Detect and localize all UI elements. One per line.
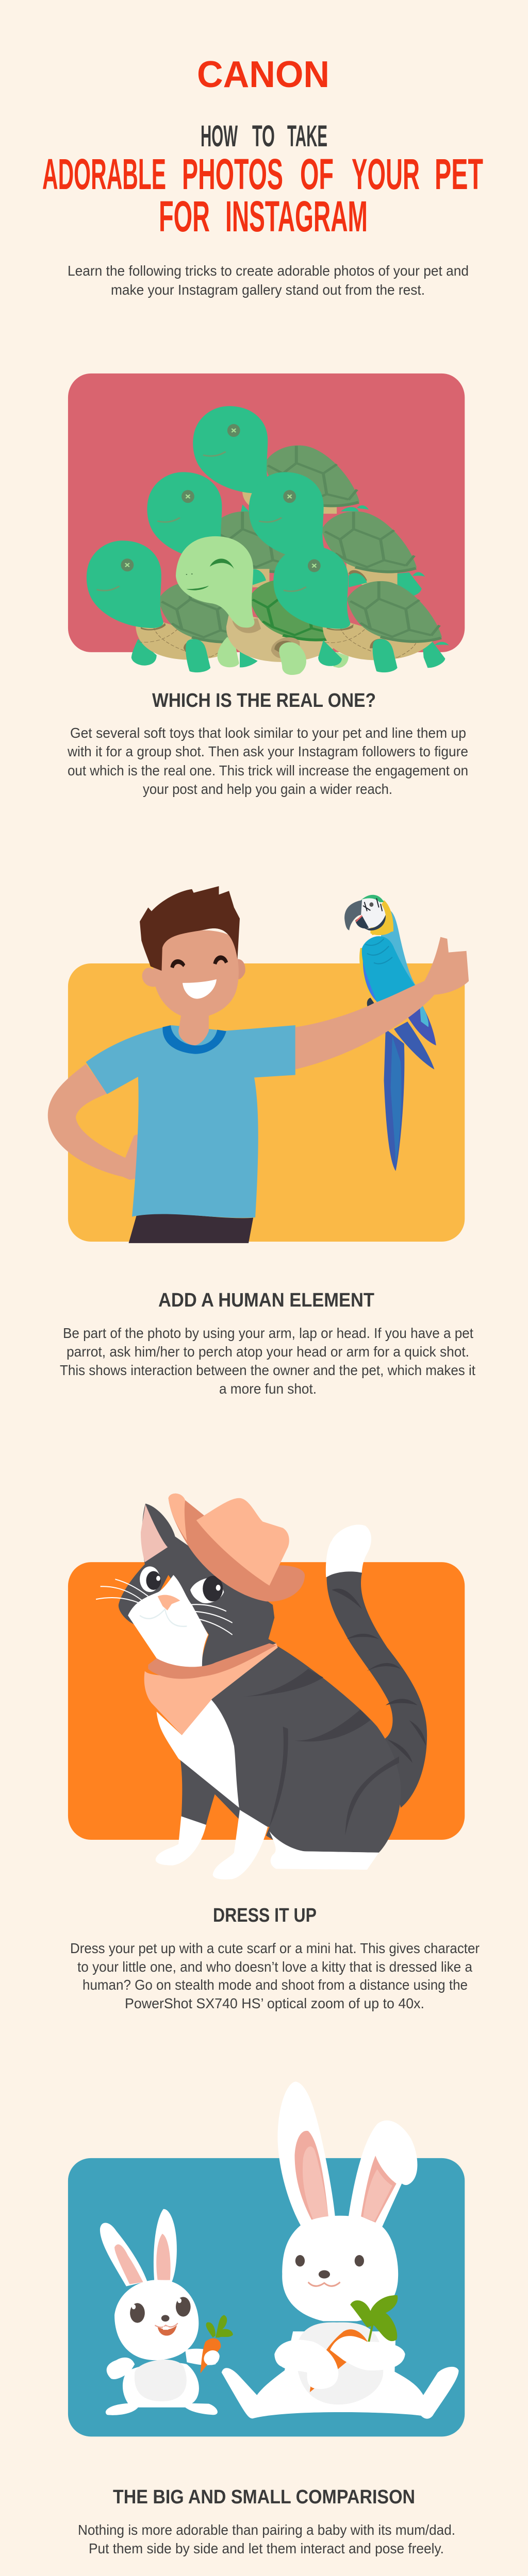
icon: cat body [156, 1646, 401, 1879]
section 1 body: Get several soft toys that look similar to your pet and line them up [70, 725, 466, 741]
panel: cat illustration [68, 1494, 465, 1879]
real turtle, centre [176, 536, 349, 675]
section 1 body: your post and help you gain a wider reach. [143, 781, 392, 797]
man pants [128, 1214, 253, 1243]
title: PHOTOS [182, 150, 283, 198]
section 1 body [67, 725, 468, 797]
intro text: make your Instagram gallery stand out from the rest. [111, 282, 425, 298]
title: OF [300, 150, 334, 198]
section 4 heading: THE BIG AND SMALL COMPARISON [113, 2486, 415, 2508]
man neck [178, 1010, 209, 1045]
icon: cat head [96, 1503, 276, 1669]
title: FOR [159, 192, 210, 241]
man right arm [295, 937, 469, 1070]
section 2 body [60, 1325, 475, 1397]
section 1 body: with it for a group shot. Then ask your Instagram followers to figure [67, 743, 468, 759]
title: TAKE [287, 120, 327, 153]
icon: hat [169, 1494, 305, 1602]
title: HOW [201, 120, 238, 153]
section 2 body: a more fun shot. [219, 1381, 317, 1397]
title: PET [435, 150, 483, 198]
icon: big rabbit [222, 2082, 459, 2419]
icon: man [48, 886, 469, 1243]
section 2 body: parrot, ask him/her to perch atop your head or arm for a quick shot. [67, 1344, 469, 1360]
turtle top [193, 406, 369, 514]
title: TO [252, 120, 275, 153]
icon: parrot [344, 895, 436, 1171]
title: YOUR [352, 150, 420, 198]
section 4 body: Put them side by side and let them interact and pose freely. [89, 2540, 444, 2556]
turtle left bottom [87, 540, 253, 672]
title: INSTAGRAM [225, 192, 368, 241]
icon: baby rabbit [100, 2209, 233, 2415]
panel background: pink [68, 374, 465, 652]
section 3 heading: DRESS IT UP [213, 1905, 317, 1926]
intro text: Learn the following tricks to create adorable photos of your pet and [68, 263, 469, 279]
panel: turtles illustration [68, 374, 465, 675]
section 3 body: human? Go on stealth mode and shoot from a distance using the [82, 1977, 468, 1993]
turtle right bottom [273, 546, 449, 672]
man shirt [86, 1025, 295, 1218]
man head [140, 886, 245, 1019]
turtle second row right [322, 512, 425, 597]
panel: rabbits illustration [68, 2082, 465, 2436]
title [42, 120, 483, 241]
section 4 body [78, 2522, 455, 2556]
panel: man with parrot illustration [48, 886, 469, 1243]
panel background: orange [68, 1562, 465, 1840]
section 2 body: Be part of the photo by using your arm, lap or head. If you have a pet [63, 1325, 473, 1341]
section 2 heading: ADD A HUMAN ELEMENT [158, 1290, 374, 1311]
section 1 body: out which is the real one. This trick will increase the engagement on [68, 762, 468, 778]
third head, second row centre [249, 472, 326, 560]
section 3 body: to your little one, and who doesn’t love a kitty that is dressed like a [77, 1959, 472, 1975]
icon: cat tail [326, 1524, 427, 1808]
logo: Canon: CANON [197, 54, 329, 95]
icon: bandana [144, 1643, 278, 1735]
section 3 body: Dress your pet up with a cute scarf or a mini hat. This gives character [70, 1940, 480, 1956]
title: ADORABLE [42, 150, 166, 198]
section 2 body: This shows interaction between the owner and the pet, which makes it [60, 1362, 475, 1378]
section 1 heading: WHICH IS THE REAL ONE? [152, 690, 376, 711]
man collar [162, 1025, 226, 1054]
panel background: blue [68, 2158, 465, 2436]
intro text [68, 263, 469, 298]
section 4 body: Nothing is more adorable than pairing a baby with its mum/dad. [78, 2522, 455, 2538]
panel background: yellow [68, 963, 465, 1242]
section 3 body: PowerShot SX740 HS’ optical zoom of up to 40x. [125, 1995, 424, 2011]
turtle second row left [147, 472, 305, 587]
section 3 body [70, 1940, 480, 2011]
man left arm [48, 1064, 160, 1180]
